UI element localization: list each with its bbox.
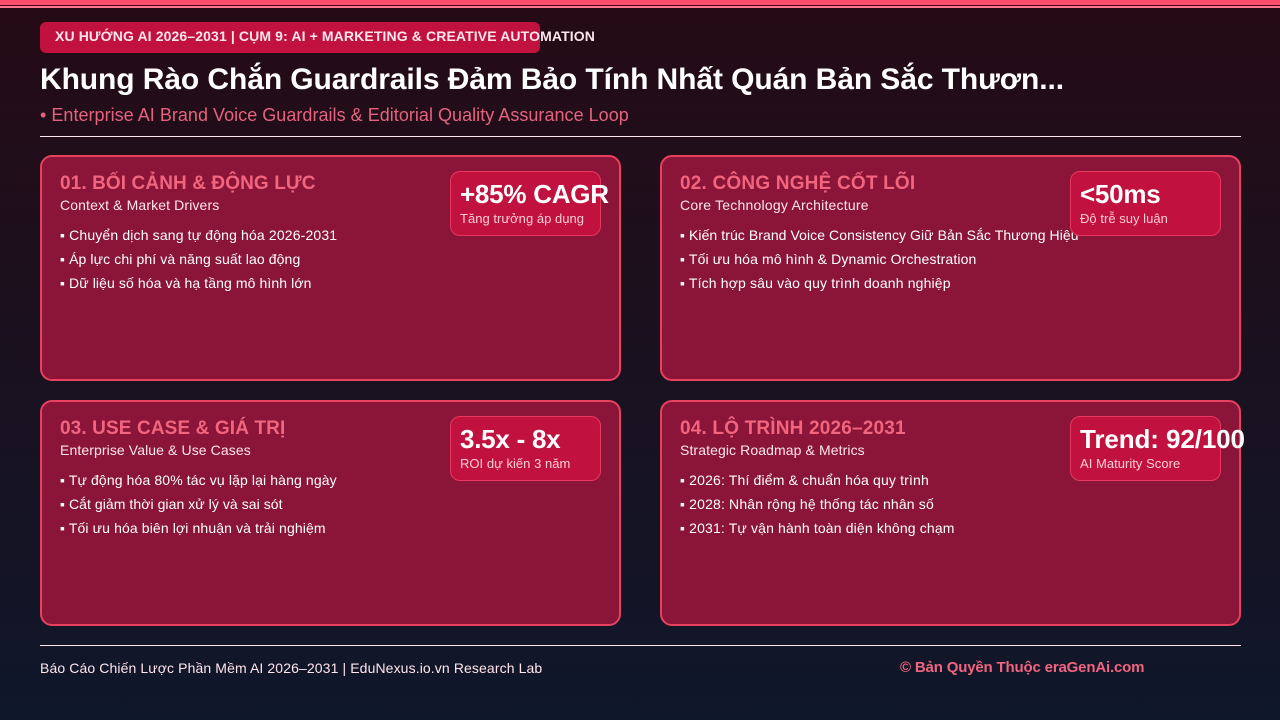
bullet list: ▪ Chuyển dịch sang tự động hóa 2026-2031 bbox=[60, 227, 337, 243]
metric badge: +85% CAGR bbox=[460, 179, 609, 209]
bullet list: ▪ 2026: Thí điểm & chuẩn hóa quy trình bbox=[680, 472, 929, 488]
category tag: XU HƯỚNG AI 2026–2031 | CỤM 9: AI + MARKETING & CREATIVE AUTOMATION bbox=[55, 28, 595, 44]
panel: 04 roadmap bbox=[660, 400, 1241, 626]
panel subheading: Enterprise Value & Use Cases bbox=[60, 442, 251, 458]
bullet list bbox=[680, 472, 955, 536]
bullet list: ▪ Áp lực chi phí và năng suất lao động bbox=[60, 251, 300, 267]
panel subheading: Strategic Roadmap & Metrics bbox=[680, 442, 865, 458]
panel: 01 context bbox=[40, 155, 621, 381]
metric badge bbox=[450, 171, 601, 236]
panel heading: 04. LỘ TRÌNH 2026–2031 bbox=[680, 418, 906, 439]
bullet list: ▪ Tự động hóa 80% tác vụ lặp lại hàng ngày bbox=[60, 472, 337, 488]
bullet list: ▪ 2031: Tự vận hành toàn diện không chạm bbox=[680, 520, 955, 536]
bullet list: ▪ Cắt giảm thời gian xử lý và sai sót bbox=[60, 496, 283, 512]
title: Khung Rào Chắn Guardrails Đảm Bảo Tính Nhất Quán Bản Sắc Thươn... bbox=[40, 63, 1064, 96]
panel heading: 02. CÔNG NGHỆ CỐT LÕI bbox=[680, 173, 915, 194]
top accent bar bbox=[0, 0, 1280, 8]
metric badge: ROI dự kiến 3 năm bbox=[460, 456, 570, 471]
bullet list bbox=[60, 472, 337, 536]
category tag bbox=[40, 22, 540, 53]
metric badge: <50ms bbox=[1080, 179, 1160, 209]
bullet list bbox=[680, 227, 1079, 291]
panel: 02 technology bbox=[660, 155, 1241, 381]
metric badge: 3.5x - 8x bbox=[460, 424, 560, 454]
bullet list bbox=[60, 227, 337, 291]
bullet list: ▪ Tích hợp sâu vào quy trình doanh nghiệp bbox=[680, 275, 951, 291]
metric badge bbox=[450, 416, 601, 481]
metric badge bbox=[1070, 416, 1221, 481]
metric badge bbox=[1070, 171, 1221, 236]
footer source: Báo Cáo Chiến Lược Phần Mềm AI 2026–2031 | EduNexus.io.vn Research Lab bbox=[40, 660, 542, 676]
bullet list: ▪ Kiến trúc Brand Voice Consistency Giữ Bản Sắc Thương Hiệu bbox=[680, 227, 1079, 243]
panel: 03 use case bbox=[40, 400, 621, 626]
metric badge: Trend: 92/100 bbox=[1080, 424, 1245, 454]
bullet list: ▪ Tối ưu hóa mô hình & Dynamic Orchestration bbox=[680, 251, 976, 267]
bullet list: ▪ Tối ưu hóa biên lợi nhuận và trải nghiệm bbox=[60, 520, 326, 536]
subtitle: • Enterprise AI Brand Voice Guardrails & Editorial Quality Assurance Loop bbox=[40, 105, 629, 125]
panel subheading: Core Technology Architecture bbox=[680, 197, 869, 213]
metric badge: AI Maturity Score bbox=[1080, 456, 1180, 471]
panel heading: 01. BỐI CẢNH & ĐỘNG LỰC bbox=[60, 173, 316, 194]
metric badge: Tăng trưởng áp dụng bbox=[460, 211, 584, 226]
metric badge: Độ trễ suy luận bbox=[1080, 211, 1168, 226]
panel subheading: Context & Market Drivers bbox=[60, 197, 219, 213]
footer copyright: © Bản Quyền Thuộc eraGenAi.com bbox=[900, 659, 1144, 676]
bullet list: ▪ Dữ liệu số hóa và hạ tầng mô hình lớn bbox=[60, 275, 312, 291]
panel heading: 03. USE CASE & GIÁ TRỊ bbox=[60, 418, 285, 439]
bullet list: ▪ 2028: Nhân rộng hệ thống tác nhân số bbox=[680, 496, 934, 512]
